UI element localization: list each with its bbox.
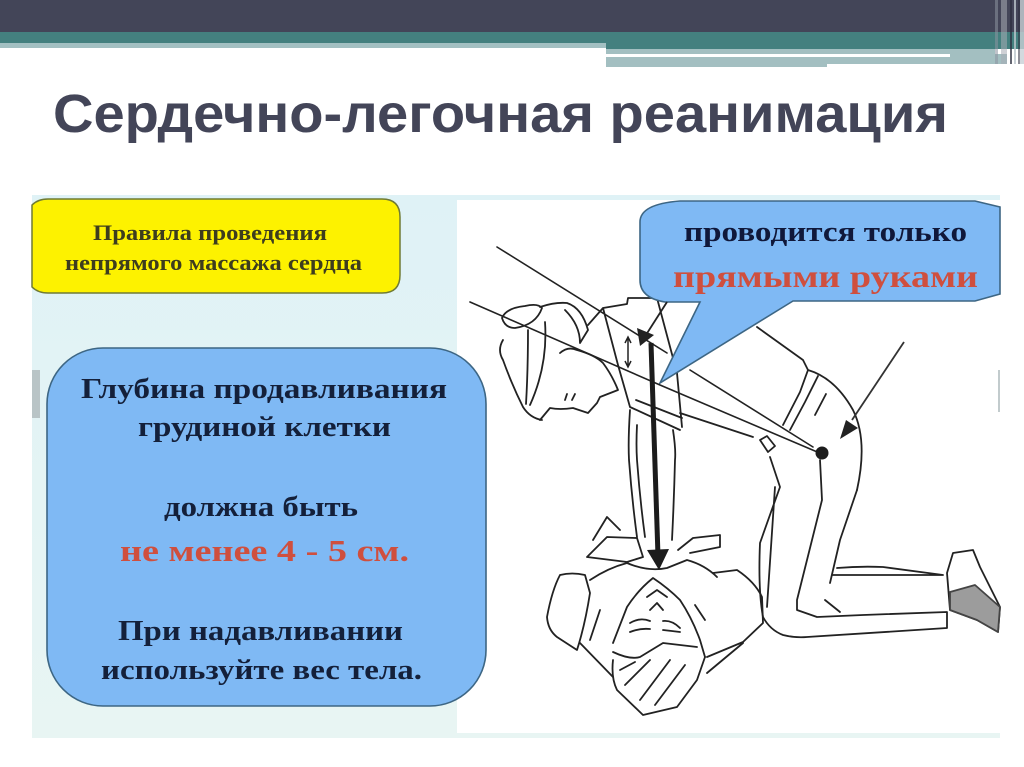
callout: straight arms: прямыми руками bbox=[673, 258, 978, 294]
rescuer shirt and torso bbox=[588, 298, 862, 490]
panel: drawing area bbox=[457, 200, 1000, 733]
panel: blue depth rules box bbox=[47, 348, 486, 706]
patient shoulders and arms bbox=[547, 560, 763, 677]
panel: blue depth rules box: используйте вес тела. bbox=[101, 654, 422, 686]
title: Сердечно-легочная реанимация bbox=[53, 84, 948, 144]
illustration: patient lying bbox=[547, 517, 763, 715]
arrow: vertical force bbox=[647, 343, 669, 570]
hip pivot dot bbox=[816, 446, 828, 460]
panel: blue depth rules box: При надавливании bbox=[118, 615, 403, 647]
patient hands bbox=[587, 517, 720, 562]
callout: straight arms: проводится только bbox=[684, 216, 967, 248]
arrow: hip bbox=[840, 342, 904, 439]
rescuer belt and hips bbox=[760, 370, 826, 452]
patient face bbox=[613, 578, 705, 657]
patient hair bbox=[612, 643, 705, 715]
header band bbox=[0, 0, 1024, 68]
callout: straight arms bbox=[640, 201, 1000, 383]
panel: blue depth rules box: грудиной клетки bbox=[138, 411, 391, 443]
panel: yellow heading box: Правила проведения bbox=[93, 220, 327, 245]
panel: yellow heading box: непрямого массажа сердца bbox=[65, 250, 362, 275]
illustration: rescuer kneeling bbox=[500, 298, 1000, 637]
panel: illustration background bbox=[32, 195, 1000, 738]
rescuer shoe bbox=[947, 550, 1000, 632]
rescuer legs bbox=[759, 457, 947, 637]
panel: yellow heading box bbox=[32, 199, 400, 293]
side tab left bbox=[32, 370, 40, 418]
rescuer arms bbox=[629, 410, 675, 540]
arrow: chest small bbox=[625, 302, 667, 367]
panel: blue depth rules box: не менее 4 - 5 см. bbox=[120, 533, 409, 568]
rescuer head and hair bbox=[500, 303, 618, 420]
panel: blue depth rules box: должна быть bbox=[164, 491, 358, 523]
panel: blue depth rules box: Глубина продавливания bbox=[81, 373, 447, 405]
side tab right bbox=[998, 370, 1000, 412]
diagram lines: body alignment bbox=[470, 247, 822, 454]
